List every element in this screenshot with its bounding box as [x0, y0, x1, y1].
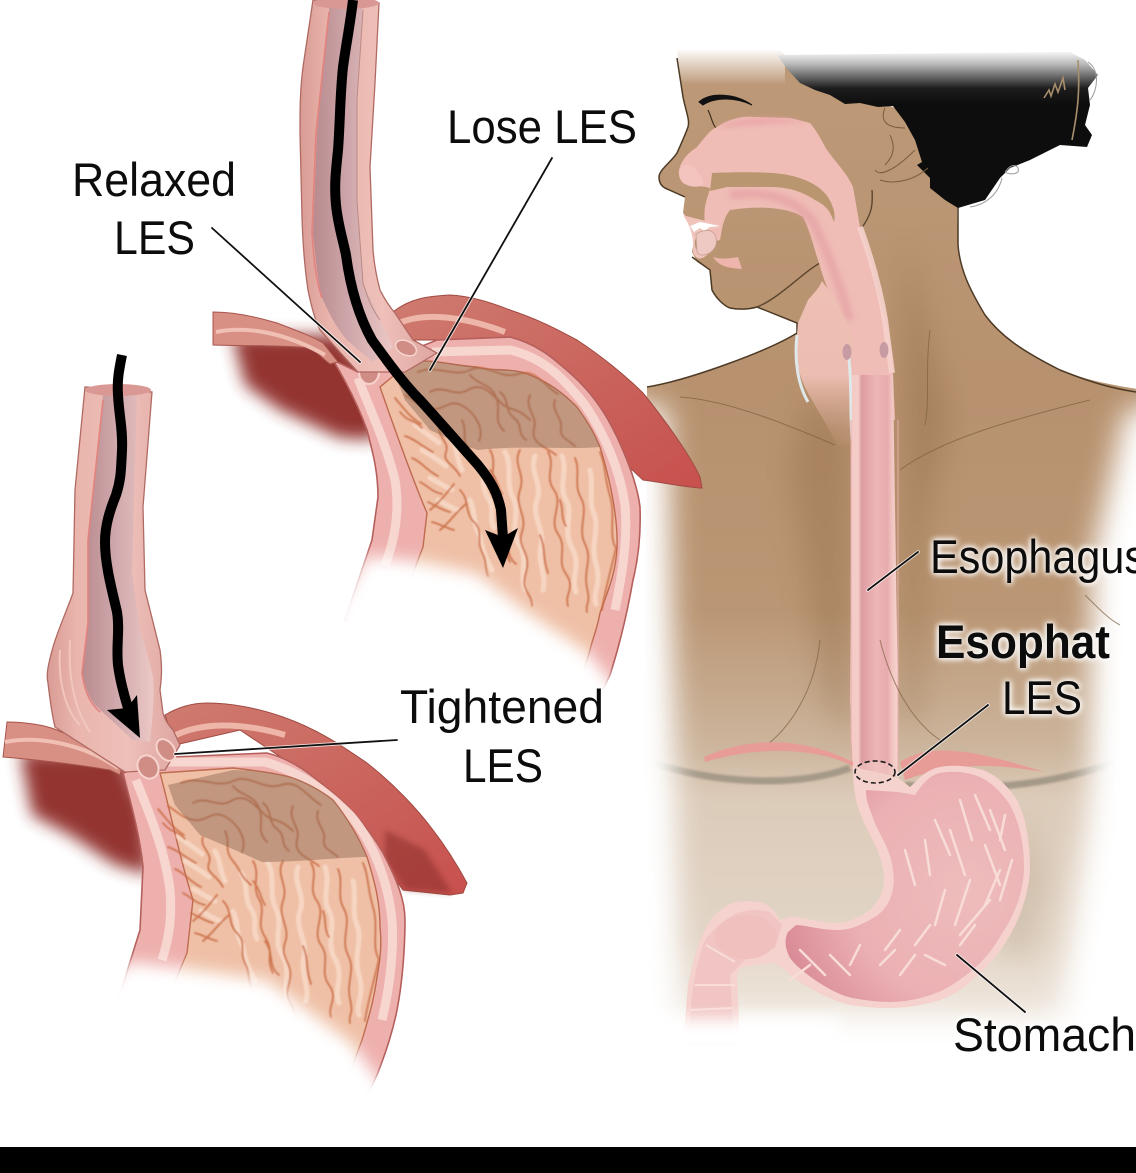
stomach and duodenum: [683, 766, 1030, 1045]
duodenum folds: [690, 945, 735, 1010]
teeth: [690, 222, 720, 232]
stomach interior: [160, 768, 381, 1085]
left LES knob: [359, 360, 379, 384]
label: Relaxed LES: Relaxed: [72, 153, 236, 206]
larynx edge: [796, 335, 852, 440]
diaphragm line right: [905, 762, 1115, 788]
eyebrow: [699, 95, 752, 105]
stomach interior: [380, 361, 617, 700]
left diaphragm band: [3, 722, 123, 775]
nasal and oral airway: [679, 117, 895, 420]
diaphragm dome back: [165, 703, 467, 895]
muscle strands: [60, 640, 90, 732]
left band highlight: [5, 740, 118, 768]
jaw line: [757, 190, 872, 307]
stomach wall: [115, 753, 405, 1100]
diaphragm line left: [662, 764, 852, 786]
shadow over upper stomach: [168, 770, 367, 862]
shadow under dome: [385, 830, 452, 893]
figure: woman in profile: [640, 45, 1136, 1100]
larynx: [796, 281, 853, 445]
label: Tightened LES: LES: [463, 739, 543, 792]
diaphragm dome back: [393, 295, 702, 488]
fade at stomach bottom: [85, 962, 398, 1145]
bottom black bar: [0, 1147, 1136, 1173]
label: Lose LES: Lose LES: [447, 100, 637, 153]
ear: [875, 108, 928, 182]
LES dashed ring: [855, 761, 895, 783]
stomach lumen: [786, 772, 1024, 1002]
hair highlight: [1044, 60, 1079, 140]
cut edge: [85, 384, 151, 396]
hair: [777, 52, 1098, 208]
hair wisps: [970, 62, 1096, 207]
LES knobs: [133, 752, 163, 782]
skin silhouette: [640, 50, 1136, 1100]
diaphragm muscle left: [704, 742, 853, 766]
right LES knob: [393, 337, 419, 359]
upper sinus highlight: [715, 118, 808, 128]
red shadow under left diaphragm: [20, 752, 150, 875]
esophagus lumen: [313, 0, 393, 362]
chest lines: [680, 330, 1120, 750]
top fade: [660, 45, 785, 87]
esophagus tube: [850, 375, 898, 775]
label: Esophat LES: [936, 615, 1110, 724]
left band highlight: [216, 330, 325, 355]
rugae folds: [395, 368, 616, 612]
esophagus nodes: [880, 342, 888, 358]
leader lines: [175, 158, 1025, 1012]
label: Esophat LES: LES: [1002, 671, 1082, 724]
wall highlight: [136, 762, 393, 1020]
esophagus upper: [860, 227, 892, 373]
stomach wall: [333, 337, 640, 700]
lumen: [82, 395, 154, 742]
shadow around esophagus: [905, 240, 950, 720]
eye: [708, 110, 741, 135]
label: Esophat LES: Esophat: [936, 615, 1110, 668]
label: Tightened LES: [400, 680, 604, 792]
esophagus wall: [47, 387, 180, 772]
fade at stomach bottom: [300, 556, 628, 770]
duodenum fade: [640, 1018, 840, 1058]
nose pink: [679, 165, 703, 187]
chin pink: [713, 257, 742, 269]
duodenum lumen: [689, 910, 782, 1045]
pyloric bulb: [715, 915, 777, 959]
throat shading: [730, 194, 850, 320]
inner red line: [82, 400, 103, 712]
mouth interior: [696, 230, 716, 255]
panel: relaxed LES illustration: [213, 0, 702, 770]
lips and mouth: [683, 215, 722, 258]
label: Relaxed LES: [72, 153, 236, 264]
stomach wall highlight: [358, 350, 626, 610]
label: Tightened LES: Tightened: [400, 680, 604, 733]
label: Relaxed LES: LES: [114, 211, 195, 264]
palate: [710, 172, 835, 222]
rugae folds: [158, 779, 379, 1023]
panel: tightened LES illustration: [3, 355, 467, 1145]
diaphragm inner band: [395, 317, 505, 332]
dome inner band: [172, 725, 285, 737]
esophageal cut edge: [313, 0, 379, 9]
face outline: [647, 58, 1136, 392]
inner pale line: [357, 10, 380, 320]
label: Stomach: Stomach: [953, 1008, 1136, 1061]
diaphragm muscle right: [900, 751, 1044, 780]
swallow arrow: [335, 0, 518, 568]
blocked swallow arrow: [105, 355, 140, 738]
red shadow under left diaphragm: [232, 335, 385, 440]
shadow over upper stomach: [395, 361, 600, 450]
left diaphragm band: [213, 312, 338, 364]
stomach folds: [790, 795, 1012, 980]
esophagus wall: [300, 0, 437, 372]
inner red line: [312, 12, 329, 298]
